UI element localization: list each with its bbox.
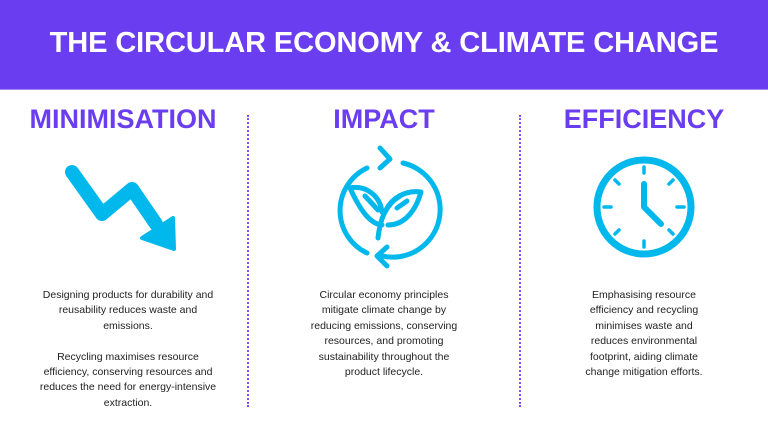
text: minimisation: Designing products for durability and <box>43 289 213 301</box>
text: minimisation: Recycling maximises resource <box>57 351 199 363</box>
text: efficiency: change mitigation efforts. <box>585 366 703 378</box>
text: impact: resources, and promoting <box>324 335 444 347</box>
text: minimisation: efficiency, conserving resources and <box>44 366 212 378</box>
text: impact <box>311 289 457 378</box>
text: efficiency: minimises waste and <box>595 320 693 332</box>
text: efficiency: Emphasising resource <box>592 289 696 301</box>
text: minimisation: extraction. <box>104 397 152 409</box>
text: impact: Circular economy principles <box>320 289 448 301</box>
text: efficiency <box>585 289 703 378</box>
text: minimisation: reduces the need for energy-intensive <box>40 381 216 393</box>
title: THE CIRCULAR ECONOMY & CLIMATE CHANGE <box>50 27 718 59</box>
text: impact: product lifecycle. <box>345 366 423 378</box>
heading: minimisation: MINIMISATION <box>30 104 216 134</box>
text: efficiency: footprint, aiding climate <box>590 351 698 363</box>
text: minimisation: emissions. <box>103 320 153 332</box>
heading: efficiency: EFFICIENCY <box>564 104 724 134</box>
text: minimisation <box>40 289 216 409</box>
text: impact: sustainability throughout the <box>319 351 449 363</box>
icon: downward trend arrow <box>65 165 176 251</box>
text: efficiency: reduces environmental <box>591 335 697 347</box>
icon: leaves in recycle circle <box>338 146 443 268</box>
heading: impact: IMPACT <box>333 104 435 134</box>
header banner <box>0 0 768 90</box>
text: impact: reducing emissions, conserving <box>311 320 457 332</box>
text: minimisation: reusability reduces waste and <box>59 304 197 316</box>
text: impact: mitigate climate change by <box>322 304 446 316</box>
text: efficiency: efficiency and recycling <box>590 304 698 316</box>
icon: clock <box>594 156 694 258</box>
